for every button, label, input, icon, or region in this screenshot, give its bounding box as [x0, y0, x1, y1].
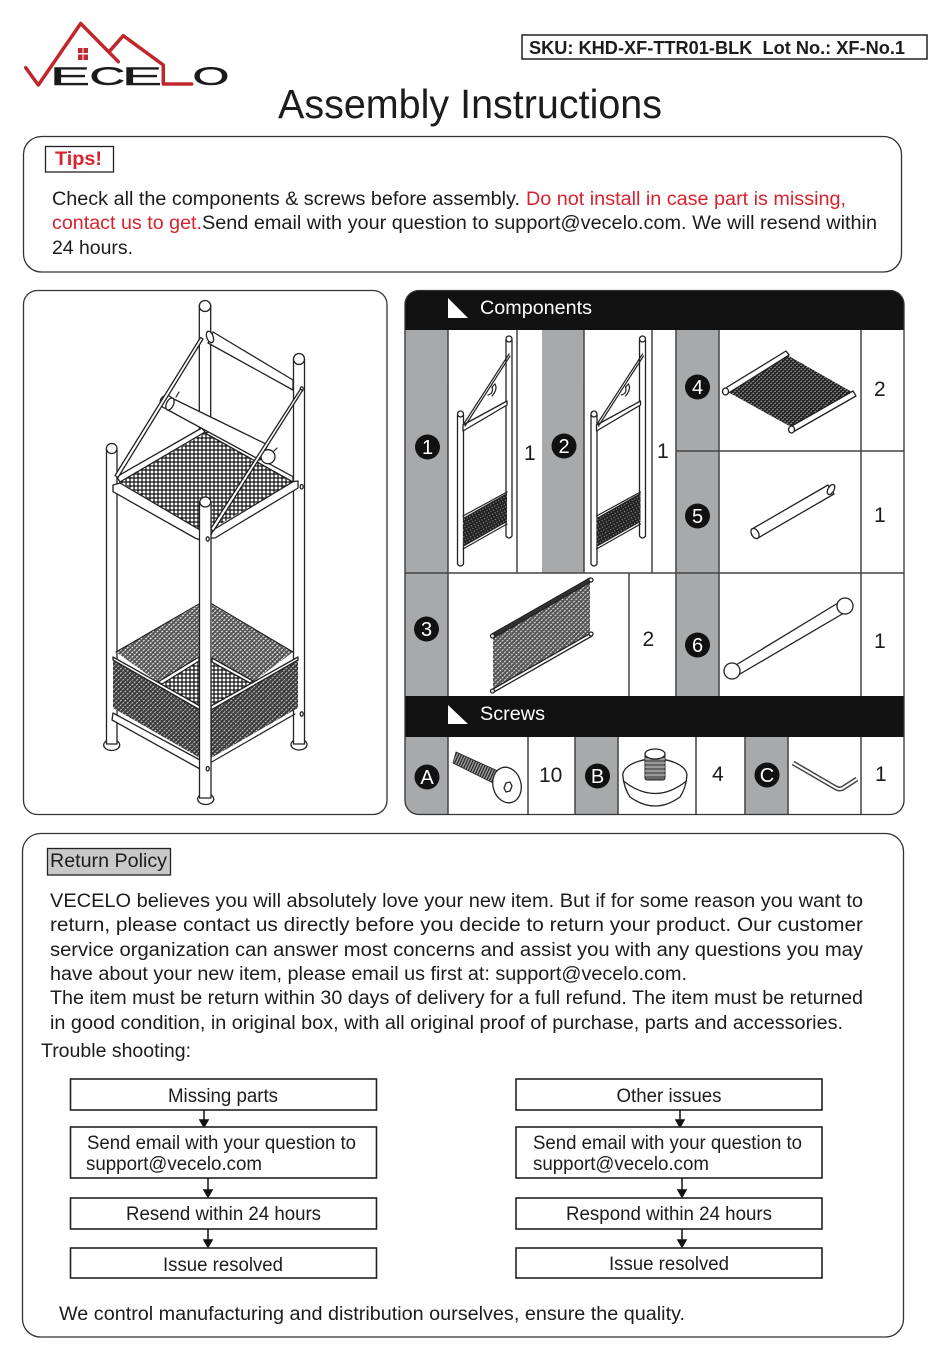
part 3 — [414, 578, 654, 693]
hex key C: 1 — [875, 763, 887, 786]
SKU and lot number box: SKU: KHD-XF-TTR01-BLK Lot No.: XF-No.1 — [529, 38, 905, 58]
return policy text: return, please contact us directly before you decide to return your product. Our customer — [50, 915, 864, 936]
panel: return policy — [22, 834, 904, 1337]
step: other issues: Other issues — [616, 1086, 722, 1107]
part 1: 1 — [422, 437, 433, 459]
screws header bar — [405, 696, 904, 737]
step: missing parts — [70, 1079, 376, 1110]
step: issue resolved — [70, 1248, 376, 1278]
logo lettering: E — [122, 63, 162, 91]
closing statement: We control manufacturing and distribution ourselves, ensure the quality. — [59, 1304, 685, 1325]
table outline — [405, 290, 904, 814]
arrow — [676, 1110, 684, 1127]
upper mesh shelf — [113, 428, 298, 540]
logo: Vecelo — [26, 24, 229, 91]
part 6: 1 — [874, 630, 886, 653]
arrow — [678, 1178, 686, 1197]
return policy text: have about your new item, please email us first at: support@vecelo.com. — [50, 964, 687, 985]
step: resend: Resend within 24 hours — [126, 1204, 321, 1225]
return policy text: The item must be return within 30 days of delivery for a full refund. The item must be returned — [50, 988, 863, 1009]
tips text: contact us to get. — [52, 213, 202, 234]
step: missing parts: Missing parts — [168, 1086, 278, 1107]
tips text: Send email with your question to support@vecelo.com. We will resend within — [202, 213, 877, 234]
part 6 — [685, 598, 886, 679]
middle rod with ball ends — [160, 392, 277, 464]
hex key C: C — [760, 765, 774, 787]
components header bar: Components — [480, 298, 592, 319]
return policy label: Return Policy — [50, 851, 168, 872]
arrow — [200, 1110, 208, 1127]
right post — [291, 354, 307, 750]
screw B: B — [591, 766, 604, 788]
part 3: 2 — [642, 628, 654, 651]
screw B — [585, 749, 724, 806]
part 2: 2 — [558, 436, 570, 458]
components header bar — [405, 290, 904, 330]
screw B: 4 — [712, 763, 724, 786]
tips text: 24 hours. — [52, 238, 133, 259]
step: send email — [516, 1127, 822, 1178]
return policy text: VECELO believes you will absolutely love your new item. But if for some reason you want to — [50, 891, 863, 912]
return policy text: service organization can answer most concerns and assist you with any questions you may — [50, 940, 864, 961]
back post — [199, 300, 211, 434]
arrow — [678, 1229, 686, 1247]
part 1 — [415, 336, 536, 566]
step: issue resolved — [516, 1248, 822, 1278]
hex key C — [754, 762, 887, 789]
arrow — [204, 1229, 212, 1247]
panel: components and screws table — [405, 290, 904, 815]
logo roof and red strokes — [26, 24, 192, 85]
step: send email: Send email with your question to — [533, 1133, 802, 1154]
front post — [198, 497, 214, 804]
screw A: 10 — [539, 764, 562, 787]
flowchart: missing parts — [70, 1079, 376, 1278]
part 4: 4 — [692, 377, 703, 399]
flowchart: other issues — [516, 1079, 822, 1278]
tips text — [52, 189, 877, 259]
part 5 — [685, 483, 886, 540]
step: issue resolved: Issue resolved — [163, 1255, 283, 1276]
step: send email: support@vecelo.com — [533, 1154, 709, 1175]
logo lettering: E — [50, 63, 90, 91]
panel: assembled product illustration — [24, 290, 387, 814]
part 4 — [685, 351, 886, 433]
title: Assembly Instructions — [278, 81, 662, 127]
step: issue resolved: Issue resolved — [609, 1254, 729, 1275]
panel: tips — [24, 136, 902, 272]
trouble shooting heading: Trouble shooting: — [41, 1041, 191, 1062]
logo lettering — [50, 63, 229, 91]
logo lettering: C — [90, 63, 125, 91]
part 5: 1 — [874, 504, 886, 527]
part 1: 1 — [524, 442, 536, 465]
step: other issues — [516, 1079, 822, 1110]
screw A — [414, 752, 562, 806]
screw A: A — [420, 767, 434, 789]
return policy text — [50, 891, 864, 1034]
step: send email — [70, 1127, 376, 1178]
tips label: Tips! — [55, 149, 102, 170]
logo window — [78, 48, 88, 60]
lower mesh basket — [112, 604, 298, 769]
step: send email: Send email with your question to — [87, 1133, 356, 1154]
part 3: 3 — [421, 619, 432, 641]
return policy text: in good condition, in original box, with all original proof of purchase, parts and accessories. — [50, 1013, 843, 1034]
upper handle bar — [205, 330, 293, 390]
diagonal rods — [115, 338, 302, 531]
gray label columns — [405, 330, 788, 815]
tips text: Check all the components & screws before assembly. — [52, 189, 520, 210]
part 2: 1 — [657, 440, 669, 463]
logo lettering: O — [193, 63, 229, 91]
part 5: 5 — [692, 506, 703, 528]
part 6: 6 — [692, 635, 703, 657]
step: send email: support@vecelo.com — [86, 1154, 262, 1175]
left post — [104, 444, 120, 750]
step: respond — [516, 1198, 822, 1229]
tips text: Do not install in case part is missing, — [526, 189, 846, 210]
part 2 — [552, 336, 669, 566]
screws header bar: Screws — [480, 704, 545, 725]
step: respond: Respond within 24 hours — [566, 1204, 772, 1225]
step: resend — [70, 1198, 376, 1229]
arrow — [204, 1178, 212, 1197]
tips label — [46, 146, 114, 172]
part 4: 2 — [874, 378, 886, 401]
